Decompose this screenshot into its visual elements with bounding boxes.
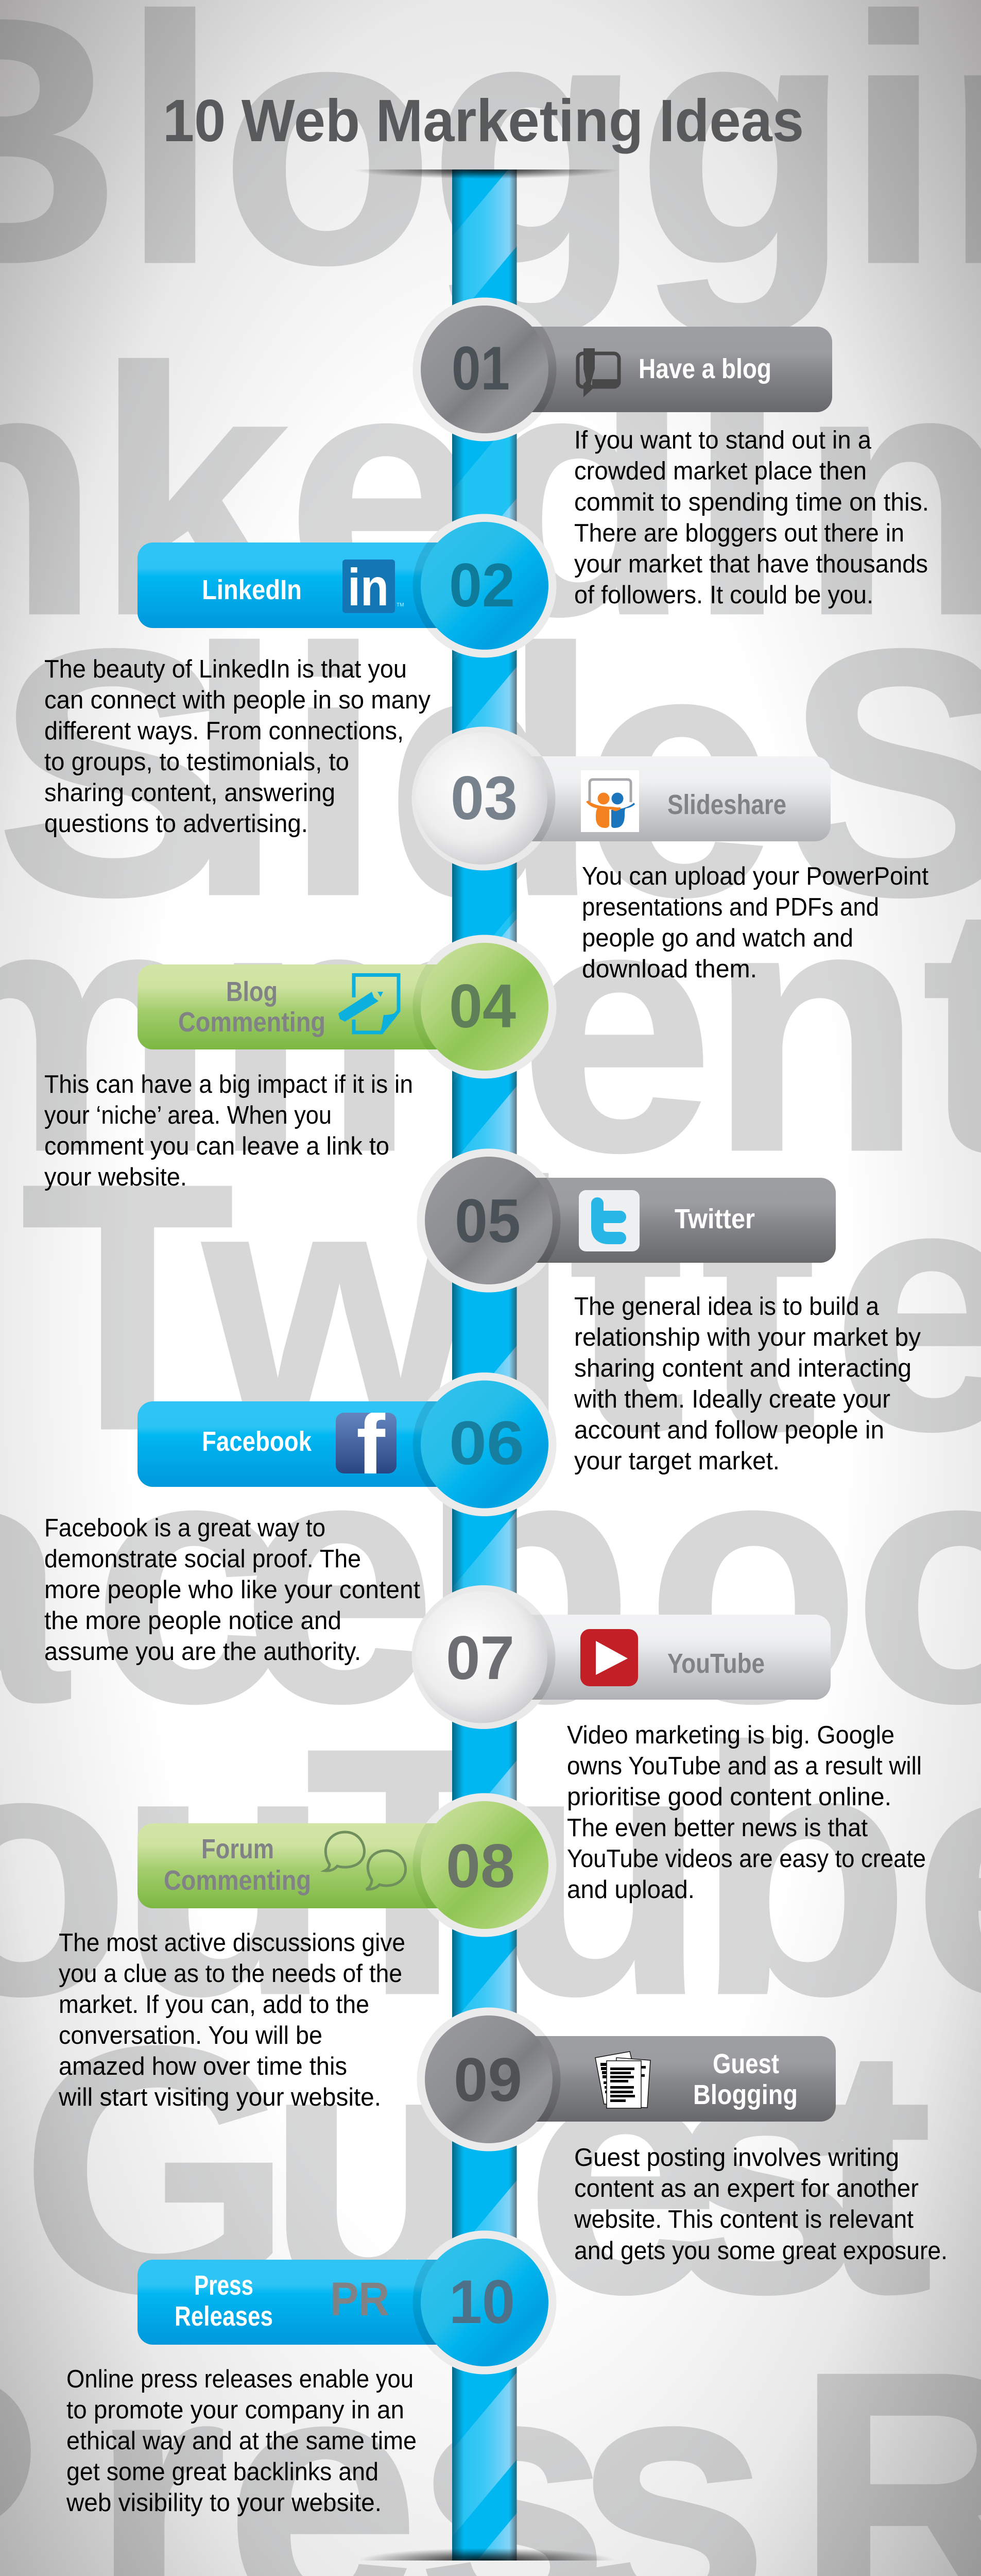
- text: youtube description: owns YouTube and as a result will: [567, 1752, 922, 1780]
- icon: linkedin: in: [348, 558, 389, 617]
- number 10: 10: [449, 2267, 515, 2336]
- text: slideshare description: download them.: [582, 955, 757, 983]
- text: facebook description: demonstrate social proof. The: [44, 1545, 361, 1573]
- text: slideshare description: [582, 862, 928, 983]
- text: have a blog description: commit to spending time on this.: [574, 488, 929, 516]
- icon: speech bubbles: [325, 1832, 406, 1889]
- text: blog commenting description: your ‘niche’ area. When you: [44, 1101, 332, 1129]
- label: guest blogging: Guest: [713, 2048, 779, 2079]
- text: press releases description: [66, 2365, 417, 2517]
- text: facebook description: Facebook is a great way to: [44, 1514, 325, 1542]
- label: facebook: Facebook: [202, 1426, 312, 1457]
- text: guest blogging description: content as an expert for another: [574, 2175, 919, 2202]
- number 05: 05: [455, 1187, 521, 1256]
- step 06: facebook: [44, 1372, 556, 1666]
- text: guest blogging description: website. This content is relevant: [574, 2206, 914, 2233]
- text: linkedin description: can connect with people in so many: [44, 686, 431, 714]
- text: press releases description: to promote your company in an: [66, 2396, 404, 2424]
- text: linkedin description: to groups, to testimonials, to: [44, 748, 349, 776]
- text: blog commenting description: [44, 1071, 413, 1191]
- text: twitter description: relationship with your market by: [574, 1324, 921, 1351]
- label: press releases: Press: [194, 2270, 253, 2301]
- text: facebook description: [44, 1514, 420, 1666]
- text: press releases description: web visibility to your website.: [66, 2489, 382, 2517]
- text: twitter description: sharing content and interacting: [574, 1354, 911, 1382]
- text: linkedin description: questions to advertising.: [44, 810, 308, 838]
- text: forum commenting description: you a clue as to the needs of the: [59, 1960, 402, 1988]
- text: youtube description: Video marketing is big. Google: [567, 1721, 894, 1749]
- text: facebook description: assume you are the authority.: [44, 1638, 361, 1666]
- icon: youtube: [580, 1629, 638, 1686]
- icon: stacked documents: [595, 2052, 650, 2108]
- icon: PR: PR: [330, 2273, 389, 2326]
- text: guest blogging description: and gets you some great exposure.: [574, 2237, 948, 2265]
- central timeline pole: [353, 159, 621, 2576]
- text: press releases description: Online press releases enable you: [66, 2365, 414, 2393]
- bottom shadow: [363, 2549, 610, 2561]
- label: guest blogging: Blogging: [693, 2079, 798, 2110]
- label: linkedin: LinkedIn: [202, 574, 302, 605]
- step 07: youtube: [412, 1585, 926, 1904]
- text: guest blogging description: Guest posting involves writing: [574, 2144, 899, 2172]
- icon: twitter: [579, 1190, 640, 1251]
- icon: page with pencil: [338, 975, 399, 1032]
- icon: facebook: [336, 1413, 397, 1473]
- step 10: press releases: [66, 2231, 557, 2517]
- text: twitter description: your target market.: [574, 1447, 780, 1475]
- bar: linkedin: [137, 543, 485, 628]
- text: slideshare description: people go and watch and: [582, 924, 853, 952]
- text: twitter description: The general idea is to build a: [574, 1293, 880, 1320]
- text: have a blog description: If you want to stand out in a: [574, 427, 872, 454]
- step 09: guest blogging: [417, 2007, 948, 2265]
- text: twitter description: account and follow people in: [574, 1416, 884, 1444]
- text: have a blog description: your market that have thousands: [574, 550, 928, 578]
- top shadow: [358, 170, 614, 178]
- text: blog commenting description: your website.: [44, 1163, 187, 1191]
- bar: facebook: [137, 1401, 485, 1487]
- text: press releases description: ethical way and at the same time: [66, 2427, 417, 2455]
- step 03: slideshare: [412, 726, 928, 983]
- text: have a blog description: crowded market place then: [574, 457, 867, 485]
- number 04: 04: [449, 972, 516, 1041]
- number 01: 01: [452, 334, 510, 403]
- number 09: 09: [454, 2045, 522, 2114]
- label: youtube: YouTube: [667, 1648, 765, 1679]
- text: forum commenting description: conversation. You will be: [59, 2022, 322, 2049]
- bar: twitter: [489, 1178, 836, 1263]
- text: forum commenting description: amazed how over time this: [59, 2053, 347, 2080]
- bar: have a blog: [485, 327, 832, 412]
- icon: slideshare: [581, 770, 639, 832]
- label: blog commenting: [178, 976, 325, 1038]
- text: youtube description: [567, 1721, 926, 1904]
- text: youtube description: YouTube videos are easy to create: [567, 1845, 926, 1873]
- text: have a blog description: There are bloggers out there in: [574, 519, 904, 547]
- number 07: 07: [446, 1623, 514, 1692]
- text: youtube description: prioritise good content online.: [567, 1783, 891, 1811]
- number 03: 03: [451, 764, 518, 833]
- number 02: 02: [449, 551, 515, 620]
- text: blog commenting description: comment you can leave a link to: [44, 1132, 389, 1160]
- text: youtube description: and upload.: [567, 1876, 695, 1904]
- label: press releases: [175, 2270, 273, 2332]
- text: linkedin description: The beauty of LinkedIn is that you: [44, 655, 407, 683]
- step 05: twitter: [417, 1149, 921, 1475]
- text: blog commenting description: This can have a big impact if it is in: [44, 1071, 413, 1098]
- label: forum commenting: Commenting: [164, 1865, 311, 1896]
- icon: blog bubble with pencil: [578, 348, 619, 397]
- label: slideshare: Slideshare: [667, 789, 786, 820]
- icon: facebook: f: [356, 1396, 386, 1493]
- text: slideshare description: You can upload your PowerPoint: [582, 862, 928, 890]
- watermark: Press R: [0, 2360, 981, 2576]
- text: guest blogging description: [574, 2144, 948, 2265]
- label: twitter: Twitter: [675, 1204, 755, 1234]
- text: youtube description: The even better news is that: [567, 1814, 868, 1842]
- text: facebook description: the more people notice and: [44, 1607, 341, 1635]
- bar: blog commenting: [137, 964, 485, 1049]
- label: blog commenting: Commenting: [178, 1007, 325, 1038]
- label: forum commenting: Forum: [201, 1834, 274, 1865]
- text: forum commenting description: [58, 1929, 405, 2111]
- text: have a blog description: of followers. It could be you.: [574, 581, 873, 609]
- text: linkedin description: [44, 655, 431, 838]
- text: slideshare description: presentations and PDFs and: [582, 893, 879, 921]
- text: forum commenting description: The most active discussions give: [59, 1929, 405, 1957]
- label: forum commenting: [164, 1834, 311, 1896]
- title: 10 Web Marketing Ideas: [163, 87, 804, 154]
- text: have a blog description: [574, 427, 929, 609]
- step 01: have a blog: [413, 298, 929, 609]
- bar: guest blogging: [489, 2036, 836, 2122]
- bar: press releases: [137, 2260, 485, 2345]
- step 02: linkedin: [44, 514, 556, 838]
- bar: youtube: [484, 1615, 831, 1700]
- step 04: blog commenting: [44, 935, 556, 1191]
- number 08: 08: [446, 1832, 515, 1901]
- label: press releases: Releases: [175, 2301, 273, 2332]
- step 08: forum commenting: [58, 1793, 556, 2111]
- text: forum commenting description: will start visiting your website.: [58, 2083, 381, 2111]
- text: linkedin description: different ways. From connections,: [44, 717, 404, 745]
- icon: linkedin: TM: [397, 602, 404, 608]
- text: facebook description: more people who like your content: [44, 1576, 420, 1604]
- text: press releases description: get some great backlinks and: [66, 2458, 378, 2486]
- label: guest blogging: [693, 2048, 798, 2110]
- label: blog commenting: Blog: [226, 976, 278, 1007]
- text: twitter description: [574, 1293, 921, 1475]
- text: twitter description: with them. Ideally create your: [574, 1385, 890, 1413]
- text: linkedin description: sharing content, answering: [44, 779, 335, 807]
- bar: forum commenting: [137, 1823, 485, 1908]
- text: forum commenting description: market. If you can, add to the: [59, 1991, 369, 2019]
- watermark: Guest: Guest: [21, 1974, 933, 2366]
- number 06: 06: [449, 1409, 524, 1478]
- bar: slideshare: [484, 756, 831, 841]
- label: have a blog: Have a blog: [639, 353, 771, 384]
